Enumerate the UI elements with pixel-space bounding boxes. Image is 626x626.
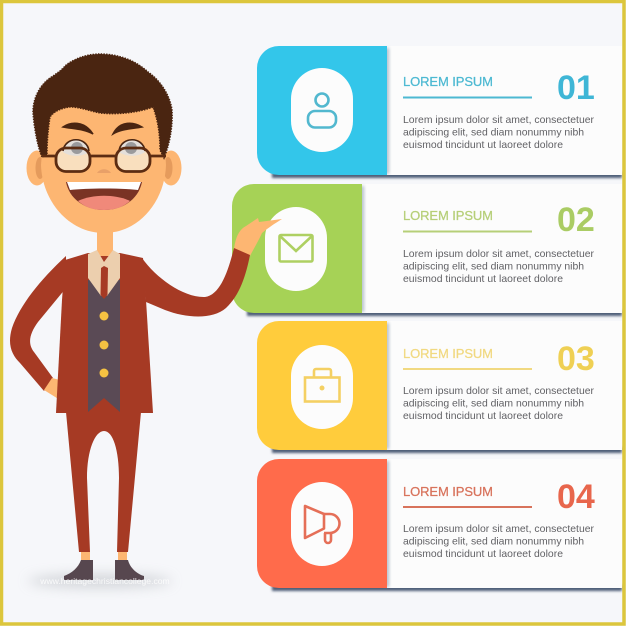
text: card 1 body: Lorem ipsum dolor sit amet, consectetuer <box>403 115 595 126</box>
text: card 3 body <box>403 386 595 422</box>
heading: card 4: LOREM IPSUM <box>403 484 493 499</box>
panel: card 3 <box>257 321 622 453</box>
text: card 2 body: adipiscing elit, sed diam nonummy nibh <box>403 262 584 272</box>
buttons <box>100 312 108 378</box>
character: businessman <box>10 54 282 588</box>
icon: briefcase <box>291 345 353 429</box>
shoes <box>64 560 144 580</box>
hair <box>33 54 172 158</box>
text: card 1 body: adipiscing elit, sed diam nonummy nibh <box>403 128 584 138</box>
text: card 2 body: Lorem ipsum dolor sit amet, consectetuer <box>403 249 595 260</box>
number: 02: 02 <box>557 201 595 239</box>
eyebrows <box>63 123 142 134</box>
hand <box>234 218 282 256</box>
text: card 4 body: euismod tincidunt ut laoreet dolore <box>403 549 563 560</box>
left hand <box>44 378 60 400</box>
left arm <box>10 256 66 391</box>
glasses <box>42 148 166 172</box>
ears <box>26 150 182 186</box>
watermark: www.heritagechristiancollege.com <box>39 576 170 586</box>
number: 04: 04 <box>557 478 595 516</box>
text: card 3 body: euismod tincidunt ut laoreet dolore <box>403 411 563 422</box>
panel: card 4 <box>257 459 622 591</box>
text: card 4 body: Lorem ipsum dolor sit amet, consectetuer <box>403 524 595 535</box>
heading: card 2: LOREM IPSUM <box>403 208 493 223</box>
heading: card 1: LOREM IPSUM <box>403 74 493 89</box>
tie <box>100 266 108 299</box>
text: card 2 body: euismod tincidunt ut laoreet dolore <box>403 274 563 285</box>
neck <box>97 228 113 256</box>
text: card 3 body: Lorem ipsum dolor sit amet, consectetuer <box>403 386 595 397</box>
icon: person <box>291 68 353 152</box>
face <box>41 100 166 233</box>
icon: megaphone <box>291 482 353 566</box>
text: card 4 body <box>403 524 595 560</box>
jacket <box>56 253 153 413</box>
number: 03: 03 <box>557 340 595 378</box>
text: card 3 body: adipiscing elit, sed diam nonummy nibh <box>403 398 584 410</box>
ground shadow <box>28 574 172 588</box>
text: card 1 body: euismod tincidunt ut laoreet dolore <box>403 140 563 151</box>
eyes <box>63 140 145 156</box>
mouth <box>66 182 142 210</box>
shirt collar <box>88 250 120 296</box>
icon: mail <box>265 207 327 291</box>
right arm <box>142 248 250 316</box>
text: card 2 body <box>403 249 595 285</box>
ankles <box>81 552 127 561</box>
vest <box>88 280 120 412</box>
lens fills <box>56 148 150 172</box>
legs <box>66 412 141 552</box>
nose <box>97 169 111 173</box>
number: 01: 01 <box>557 69 595 107</box>
panel: card 2 <box>232 184 622 316</box>
panel: card 1 <box>257 46 622 178</box>
heading: card 3: LOREM IPSUM <box>403 346 493 361</box>
text: card 1 body <box>403 115 595 151</box>
text: card 4 body: adipiscing elit, sed diam nonummy nibh <box>403 536 584 548</box>
